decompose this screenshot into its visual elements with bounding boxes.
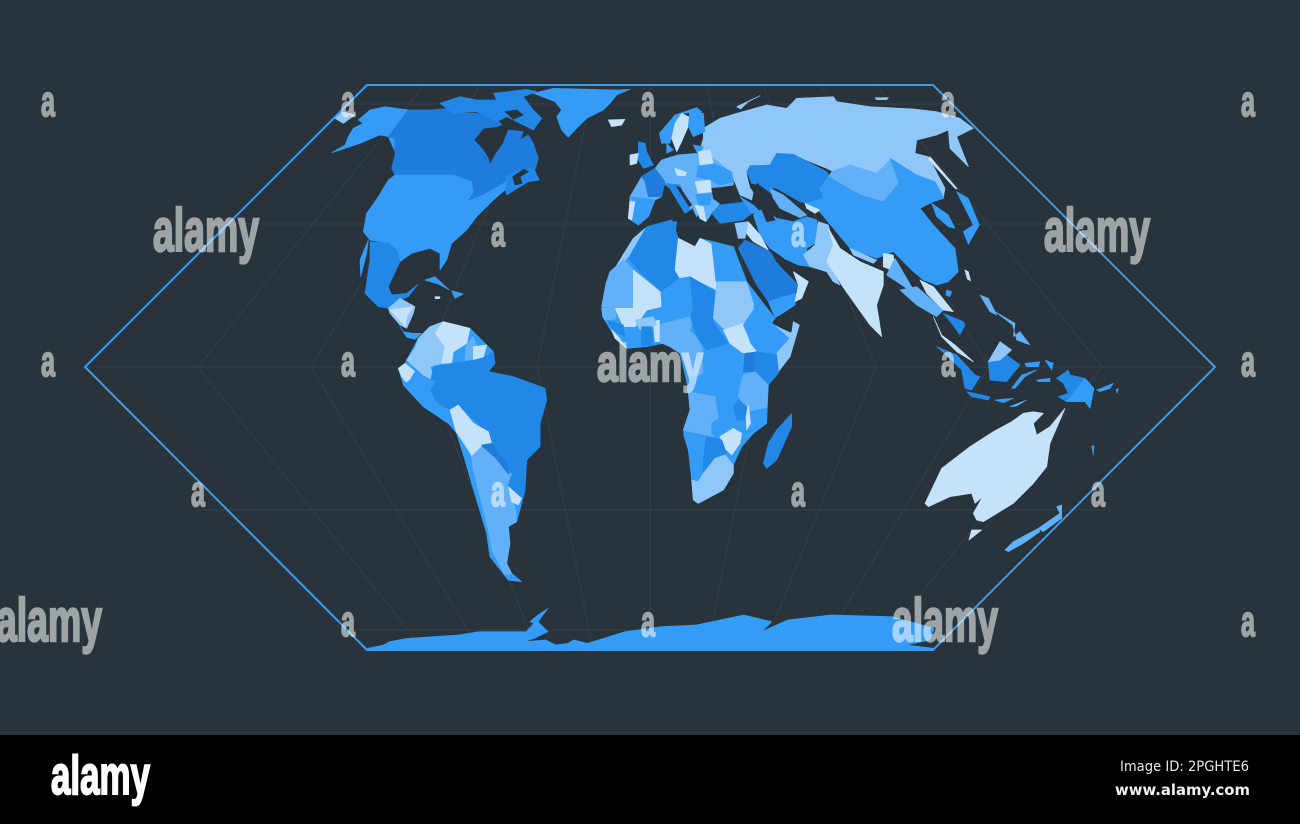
watermarks: a — [791, 207, 805, 256]
Libya — [675, 238, 717, 290]
Myanmar — [887, 258, 918, 298]
Hainan — [946, 290, 952, 297]
Bulgaria — [696, 193, 712, 205]
Greenland — [533, 88, 630, 137]
Egypt — [712, 243, 747, 282]
Caucasus — [740, 197, 762, 213]
Iran and Afghanistan — [753, 208, 818, 267]
watermarks: a — [1241, 337, 1255, 386]
Caribbean islets — [435, 297, 440, 299]
Halmahera — [1045, 360, 1053, 370]
Kazakhstan — [747, 153, 830, 203]
footer band — [0, 735, 1300, 824]
watermarks: a — [1241, 77, 1255, 126]
DR Congo — [687, 350, 745, 418]
Kenya — [755, 352, 778, 385]
Madagascar — [763, 413, 792, 468]
Mauritania — [602, 260, 633, 308]
Italy — [663, 183, 690, 213]
Czechia and Austria — [675, 168, 687, 177]
Zambia — [712, 410, 747, 437]
India — [827, 228, 883, 337]
Sakhalin — [928, 157, 957, 189]
Vanuatu — [1116, 388, 1118, 393]
Belarus — [698, 150, 713, 165]
Venezuela — [435, 322, 470, 363]
website: www.alamy.com — [1115, 781, 1250, 799]
Ecuador — [398, 363, 415, 385]
Alaska — [332, 107, 408, 153]
Chukotka tip — [335, 112, 355, 123]
Romania — [695, 180, 712, 193]
continent base — [602, 220, 799, 503]
Philippines — [980, 295, 997, 315]
Nigeria — [658, 317, 692, 347]
Germany — [662, 155, 680, 180]
watermarks: alamy — [1044, 197, 1150, 264]
France — [642, 168, 665, 197]
Russia — [700, 97, 973, 200]
watermarks: alamy — [153, 197, 259, 264]
Bolivia — [450, 405, 492, 457]
watermarks: a — [1091, 467, 1105, 516]
Paraguay — [482, 443, 508, 475]
Europe base — [628, 150, 733, 225]
Iceland — [608, 119, 625, 127]
Uganda — [743, 352, 758, 372]
Suriname — [473, 345, 487, 360]
Portugal — [628, 202, 635, 220]
Norway — [659, 108, 702, 143]
Eurasia — [628, 96, 979, 337]
continent base — [398, 322, 547, 582]
Ghana — [642, 327, 653, 347]
watermarks: alamy — [892, 587, 998, 654]
Costa Rica — [390, 307, 413, 327]
Mexico — [365, 242, 418, 308]
Timor — [1010, 400, 1027, 407]
Mali — [615, 270, 662, 327]
Pakistan — [803, 222, 840, 285]
Switzerland and Balkans — [665, 175, 703, 217]
Burkina Faso — [635, 317, 657, 330]
Oman — [793, 272, 808, 302]
Persian Gulf — [770, 249, 795, 273]
Zimbabwe — [720, 428, 742, 455]
Greece — [695, 205, 706, 222]
Namibia — [683, 434, 705, 482]
watermarks: a — [341, 597, 355, 646]
Caspian Sea — [752, 183, 775, 222]
Angola — [683, 392, 718, 437]
watermarks: a — [191, 467, 205, 516]
watermarks: a — [41, 77, 55, 126]
Ethiopia — [743, 310, 790, 353]
Mongolia — [828, 160, 900, 202]
watermarks: a — [641, 77, 655, 126]
Sulawesi north — [1025, 362, 1040, 367]
Thailand — [900, 287, 943, 317]
North America — [332, 88, 630, 328]
Seram — [1037, 378, 1050, 382]
Central America — [388, 298, 415, 328]
Sulawesi — [1012, 370, 1037, 388]
Lesser Sunda Islands — [995, 398, 1013, 403]
Baja California — [360, 240, 368, 277]
Peru — [403, 372, 460, 433]
South Africa — [692, 455, 733, 503]
Hispaniola — [452, 291, 463, 298]
Brazil — [430, 352, 547, 503]
image id: Image ID: 2PGHTE6 — [1120, 759, 1249, 775]
watermarks: a — [491, 207, 505, 256]
watermarks: a — [41, 337, 55, 386]
map: world countries — [332, 88, 1118, 650]
Malay Peninsula — [933, 317, 973, 362]
Ireland — [630, 153, 638, 165]
New Zealand — [1005, 528, 1040, 552]
Morocco and Western Sahara — [606, 228, 647, 283]
watermarks: a — [941, 77, 955, 126]
Mozambique — [733, 408, 767, 465]
Syria and Jordan — [735, 222, 748, 238]
Yemen — [768, 293, 797, 318]
South America — [390, 307, 547, 582]
Guinea — [607, 320, 625, 337]
Sabah and Sarawak — [988, 342, 1012, 362]
Botswana — [702, 437, 727, 473]
United Kingdom — [638, 142, 653, 168]
Turkey — [712, 202, 752, 223]
Antarctica — [368, 608, 934, 650]
watermarks: a — [791, 467, 805, 516]
Canada — [388, 108, 538, 202]
Tanzania — [738, 372, 768, 412]
New Zealand north — [1038, 505, 1062, 532]
Svalbard — [875, 98, 888, 100]
Papua New Guinea — [1067, 378, 1094, 408]
Poland — [678, 153, 698, 172]
Central Asia — [770, 188, 807, 218]
Nepal — [850, 248, 877, 263]
watermarks: a — [641, 597, 655, 646]
Senegal — [602, 308, 617, 322]
Novaya Zemlya — [737, 96, 760, 109]
Solomon Islands — [1097, 383, 1113, 392]
Niger — [652, 277, 693, 317]
Ukraine — [697, 163, 733, 185]
Cameroon and Gabon — [670, 332, 703, 377]
Algeria — [628, 220, 680, 292]
Uruguay — [508, 487, 522, 505]
watermarks: a — [941, 337, 955, 386]
Western New Guinea — [1057, 370, 1085, 402]
Katanga region — [733, 400, 747, 420]
Sweden — [672, 113, 692, 152]
Java — [967, 392, 990, 400]
Sudan — [713, 282, 753, 332]
Japan — [957, 192, 979, 244]
Southeast Asia and Oceania — [900, 280, 1118, 552]
Korea — [932, 203, 955, 228]
Kalimantan — [988, 350, 1020, 382]
Taiwan — [965, 270, 971, 281]
United States — [363, 175, 507, 270]
Somalia — [777, 322, 799, 372]
Benin — [653, 320, 659, 342]
Panama — [400, 327, 422, 339]
watermarks — [0, 77, 1255, 654]
watermarks: alamy — [0, 587, 102, 654]
New Caledonia — [1092, 446, 1094, 455]
watermarks: a — [341, 77, 355, 126]
Gulf of St Lawrence — [513, 169, 528, 185]
watermarks: alamy — [597, 335, 703, 393]
Black Sea — [712, 187, 742, 203]
Philippines south — [995, 312, 1030, 345]
Central African Republic — [697, 325, 728, 350]
Arctic islands — [440, 89, 542, 130]
Red Sea — [737, 258, 775, 318]
Cambodia and Vietnam — [943, 313, 965, 335]
Australia — [925, 408, 1065, 522]
Argentina — [472, 447, 517, 575]
Tasmania — [969, 530, 982, 540]
Iraq — [745, 222, 768, 250]
footer logo: alamy — [51, 744, 150, 806]
Tunisia — [668, 222, 677, 237]
Chile — [457, 433, 522, 582]
map frame: Eckert I hexagon — [85, 85, 1215, 650]
Guyana — [465, 337, 477, 362]
Hudson Strait gap — [505, 110, 523, 119]
Cuba — [425, 277, 449, 290]
Laos — [920, 280, 953, 312]
Ivory Coast — [625, 330, 642, 348]
watermarks: a — [491, 467, 505, 516]
Colombia — [407, 322, 445, 382]
Liberia — [612, 330, 627, 348]
Sumatra — [937, 347, 980, 390]
watermarks: a — [341, 337, 355, 386]
Africa — [602, 220, 799, 503]
Saudi Arabia — [738, 240, 798, 302]
Adriatic gap — [677, 187, 692, 207]
South Sudan — [723, 323, 757, 353]
Spain — [628, 197, 655, 225]
Tajikistan — [805, 203, 820, 213]
Denmark — [667, 143, 673, 153]
Chad — [690, 277, 715, 337]
watermarks: a — [1241, 597, 1255, 646]
Malawi — [746, 405, 751, 430]
Baltic states — [693, 145, 703, 155]
Canada Maritimes — [505, 167, 539, 195]
Finland — [688, 110, 705, 137]
China — [807, 158, 958, 285]
Bhutan — [883, 253, 895, 272]
